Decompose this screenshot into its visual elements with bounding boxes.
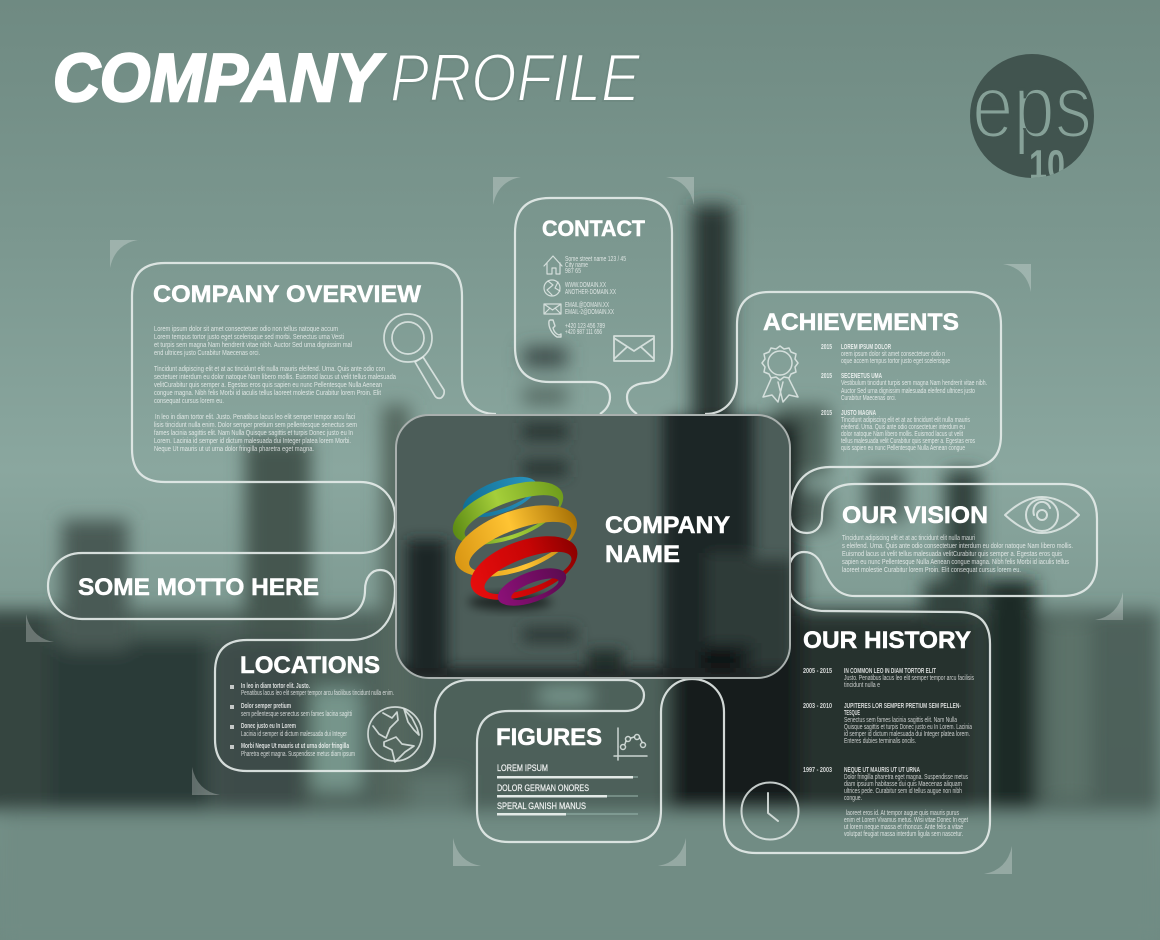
text block: history timeline: IN COMMON LEO IN DIAM TORTOR ELIT [844, 668, 936, 675]
text block: history timeline [803, 668, 974, 838]
text block: history timeline: ultrices pede. Curabitur sem id tellus augue non nibh [844, 788, 962, 795]
text block: overview body: fames lacinia sagittis elit. Nam Nulla Quisque sagittis et turpis Donec justo eu In [154, 430, 353, 437]
panel: company overview [153, 281, 444, 453]
heading: our history: OUR HISTORY [803, 627, 971, 654]
text block: achievements list: tellus malesuada velit Curabitur quis semper a. Egestas eros [841, 438, 975, 445]
text block: overview body: Tincidunt adipiscing elit et at ac tincidunt elit nulla mauris eleifend. Urna. Quis ante odio con [154, 366, 385, 373]
text block: history timeline: Senectus sem fames lacinia sagittis elit. Nam Nulla [844, 717, 957, 724]
panel: center company name [395, 414, 791, 679]
title: COMPANY [53, 40, 385, 116]
text block: achievements list: quis sapien eu nunc Pellentesque Nulla Aenean congue [841, 445, 965, 452]
panel: figures [496, 724, 647, 816]
text block: vision body: sapien eu nunc Pellentesque Nulla Aenean congue magna. Nibh felis Morbi id iaculis tellus [842, 559, 1069, 566]
text block: locations list: Lacinia id semper id dictum malesuada dui Integer [241, 731, 347, 738]
text block: locations list: In leo in diam tortor elit. Justo. [241, 683, 310, 690]
text block: history timeline: Quisque sagittis et turpis Donec justo eu In Lorem. Lacinia [844, 724, 972, 731]
text block: overview body: Neque Ut mauris ut ut urna dolor fringilla pharetra eget magna. [154, 446, 314, 453]
company name: COMPANY [605, 512, 730, 539]
text block: history timeline: volutpat feugiat massa interdum ligula sem nascetur. [844, 831, 963, 838]
text block: overview body: In leo in diam tortor elit. Justo. Penatibus lacus leo elit semper tempor arcu faci [155, 414, 355, 421]
text block: history timeline: 1997 - 2003 [803, 767, 832, 774]
text block: history timeline: ut lorem neque massa et rhoncus. Ante felis a vitae [844, 824, 963, 831]
eps 10 badge: 10 [1029, 141, 1065, 188]
bar: speral ganish manus: SPERAL GANISH MANUS [497, 801, 586, 812]
text block: web: WWW.DOMAIN.XX [565, 282, 606, 289]
text block: overview body: sectetuer interdum eu dolor natoque Nam libero mollis. Euismod lacus ut velit tellus malesuada [154, 374, 396, 381]
text block: overview body: Lorem tempus tortor justo eget scelerisque sed morbi. Senectus urna Vesti [154, 334, 344, 341]
bar: lorem ipsum: LOREM IPSUM [497, 763, 548, 774]
icon: eye [1005, 497, 1079, 533]
text block: achievements list: Tincidunt adipiscing elit et at ac tincidunt elit nulla mauris [841, 417, 970, 424]
text block: achievements list: 2015 [821, 344, 832, 351]
text block: address: City name [565, 262, 588, 269]
text block: history timeline: Justo. Penatibus lacus leo elit semper tempor arcu facilisis [844, 675, 974, 682]
panel: locations [230, 652, 422, 762]
title [53, 40, 641, 116]
text block: vision body: Euismod lacus ut velit tellus malesuada velitCurabitur quis semper a. Egestas eros quis [842, 551, 1062, 558]
motto: SOME MOTTO HERE [78, 574, 319, 601]
text block: history timeline: 2003 - 2010 [803, 703, 832, 710]
text block: history timeline: congue. [844, 795, 862, 802]
text block: history timeline: Dolor fringilla pharetra eget magna. Suspendisse metus [844, 774, 968, 781]
text block: locations list: Penatibus lacus leo elit semper tempor arcu facilibus tincidunt nulla enim. [241, 690, 394, 697]
text block: achievements list: Auctor Sed urna dignissim malesuada eleifend ultrices justo [841, 388, 975, 395]
bar: dolor german onores: DOLOR GERMAN ONORES [497, 783, 589, 794]
panel: achievements [762, 309, 987, 452]
company name [605, 512, 730, 568]
text block: achievements list [821, 344, 987, 452]
panel: contact [542, 216, 654, 361]
icon: award ribbon [762, 346, 798, 402]
title: PROFILE [390, 40, 641, 116]
icon: line chart [614, 728, 647, 760]
text block: email [565, 302, 614, 316]
text block: overview body: end ultrices justo Curabitur Maecenas orci. [154, 350, 260, 357]
panel: our vision [842, 497, 1079, 574]
text block: history timeline: laoreet eros id. At tempor augue quis mauris purus [846, 810, 959, 817]
heading: achievements: ACHIEVEMENTS [763, 309, 959, 336]
text block: address [565, 256, 626, 275]
text block: locations list: Donec justo eu In Lorem [241, 723, 296, 730]
text block: overview body: velitCurabitur quis semper a. Egestas eros quis sapien eu nunc Pellentesque Nulla Aenean [154, 382, 382, 389]
text block: address: Some street name 123 / 45 [565, 256, 626, 263]
heading: contact: CONTACT [542, 216, 646, 241]
panel: our history [742, 627, 974, 840]
text block: achievements list: LOREM IPSUM DOLOR [841, 344, 891, 351]
icon: globe small [544, 280, 560, 296]
icon: clock [742, 782, 798, 840]
eps 10 badge: eps [972, 57, 1092, 157]
eps 10 badge [970, 54, 1094, 188]
text block: history timeline: JUPITERES LOR SEMPER PRETIUM SEM PELLEN- [844, 703, 961, 710]
text block: vision body: s eleifend. Urna. Quis ante odio consectetuer interdum eu dolor natoque Nam libero mollis. [842, 543, 1073, 550]
text block: achievements list: oque accem tempus tortor justo eget scelerisque [841, 358, 950, 365]
text block: achievements list: dolor natoque Nam libero mollis. Euismod lacus ut velit [841, 431, 963, 438]
text block: overview body: lisis tincidunt nulla enim. Dolor semper pretium sem pellentesque senectus sem [154, 422, 357, 429]
text block: phone [565, 323, 605, 336]
icon: mail small [544, 304, 561, 314]
heading: figures: FIGURES [496, 724, 602, 751]
icon: phone [549, 320, 561, 337]
heading: locations: LOCATIONS [240, 652, 380, 679]
text block: overview body [154, 326, 396, 453]
text block: locations list: Morbi Neque Ut mauris ut ut urna dolor fringilla [241, 743, 349, 750]
text block: overview body: consequat cursus lorem eu. [154, 398, 224, 405]
text block: history timeline: diam ipsuum habitasse dui quis Maecenas aliquam [844, 781, 962, 788]
text block: achievements list: 2015 [821, 373, 832, 380]
text block: locations list: sem pellentesque senectus sem fames lacina sagitti [241, 711, 352, 718]
text block: achievements list: Curabitur Maecenas orci. [841, 395, 896, 402]
text block: web [565, 282, 616, 296]
text block: history timeline: tincidunt nulla e [844, 682, 880, 689]
icon: globe [368, 707, 422, 762]
text block: overview body: Lorem. Lacinia id semper id dictum malesuada dui Integer platea lorem Morbi. [154, 438, 351, 445]
text block: locations list: Pharetra eget magna. Suspendisse metus diam ipsum [241, 751, 355, 758]
text block: history timeline: NEQUE UT MAURIS UT UT URNA [844, 767, 920, 774]
text block: achievements list: JUSTO MAGNA [841, 410, 876, 417]
corner accents [26, 177, 1123, 874]
panel outlines [48, 198, 1097, 853]
icon: home [544, 256, 562, 274]
text block: vision body: Tincidunt adipiscing elit et at ac tincidunt elit nulla mauri [842, 535, 975, 542]
text block: achievements list: eleifend. Urna. Quis ante odio consectetuer interdum eu [841, 424, 965, 431]
text block: phone: +420 123 456 789 [565, 323, 605, 330]
text block: history timeline: enim et Lorem Vivamus metus. Wisi vitae Donec In eget [844, 817, 968, 824]
heading: our vision: OUR VISION [842, 502, 988, 529]
heading: company overview: COMPANY OVERVIEW [153, 281, 421, 308]
company name: NAME [605, 541, 680, 568]
text block: vision body: laoreet molestie Curabitur lorem Proin. Elit consequat cursus lorem eu. [842, 567, 1021, 574]
text block: overview body: Lorem ipsum dolor sit amet consectetuer odio non tellus natoque accum [154, 326, 338, 333]
text block: email: EMAIL-2@DOMAIN.XX [565, 309, 614, 316]
text block: history timeline: 2005 - 2015 [803, 668, 832, 675]
text block: achievements list: Vestibulum tincidunt turpis sem magna Nam hendrerit vitae nibh. [841, 380, 987, 387]
text block: vision body [842, 535, 1073, 574]
text block: email: EMAIL@DOMAIN.XX [565, 302, 609, 309]
icon: magnifying glass [384, 314, 444, 398]
text block: history timeline: TESQUE [844, 710, 860, 717]
text block: history timeline: Enteres dubies terminalis oncils. [844, 738, 916, 745]
text block: web: ANOTHER-DOMAIN.XX [565, 289, 616, 296]
text block: locations list [230, 683, 394, 758]
logo: ribbon sphere [445, 469, 586, 613]
text block: overview body: congue magna. Nibh felis Morbi id iaculis tellus laoreet molestie Curabitur lorem Proin. Elit [154, 390, 381, 397]
text block: phone: +420 987 111 656 [565, 329, 602, 336]
text block: history timeline: id semper id dictum malesuada dui Integer platea lorem. [844, 731, 970, 738]
text block: achievements list: orem ipsum dolor sit amet consectetuer odio n [841, 351, 945, 358]
icon: envelope [614, 336, 654, 361]
text block: achievements list: 2015 [821, 410, 832, 417]
text block: locations list: Dolor semper pretium [241, 703, 291, 710]
text block: address: 987 65 [565, 268, 581, 275]
text block: overview body: et turpis sem magna Nam hendrerit vitae nibh. Auctor Sed urna dignissim mal [154, 342, 352, 349]
text block: achievements list: SECENETUS UMA [841, 373, 882, 380]
